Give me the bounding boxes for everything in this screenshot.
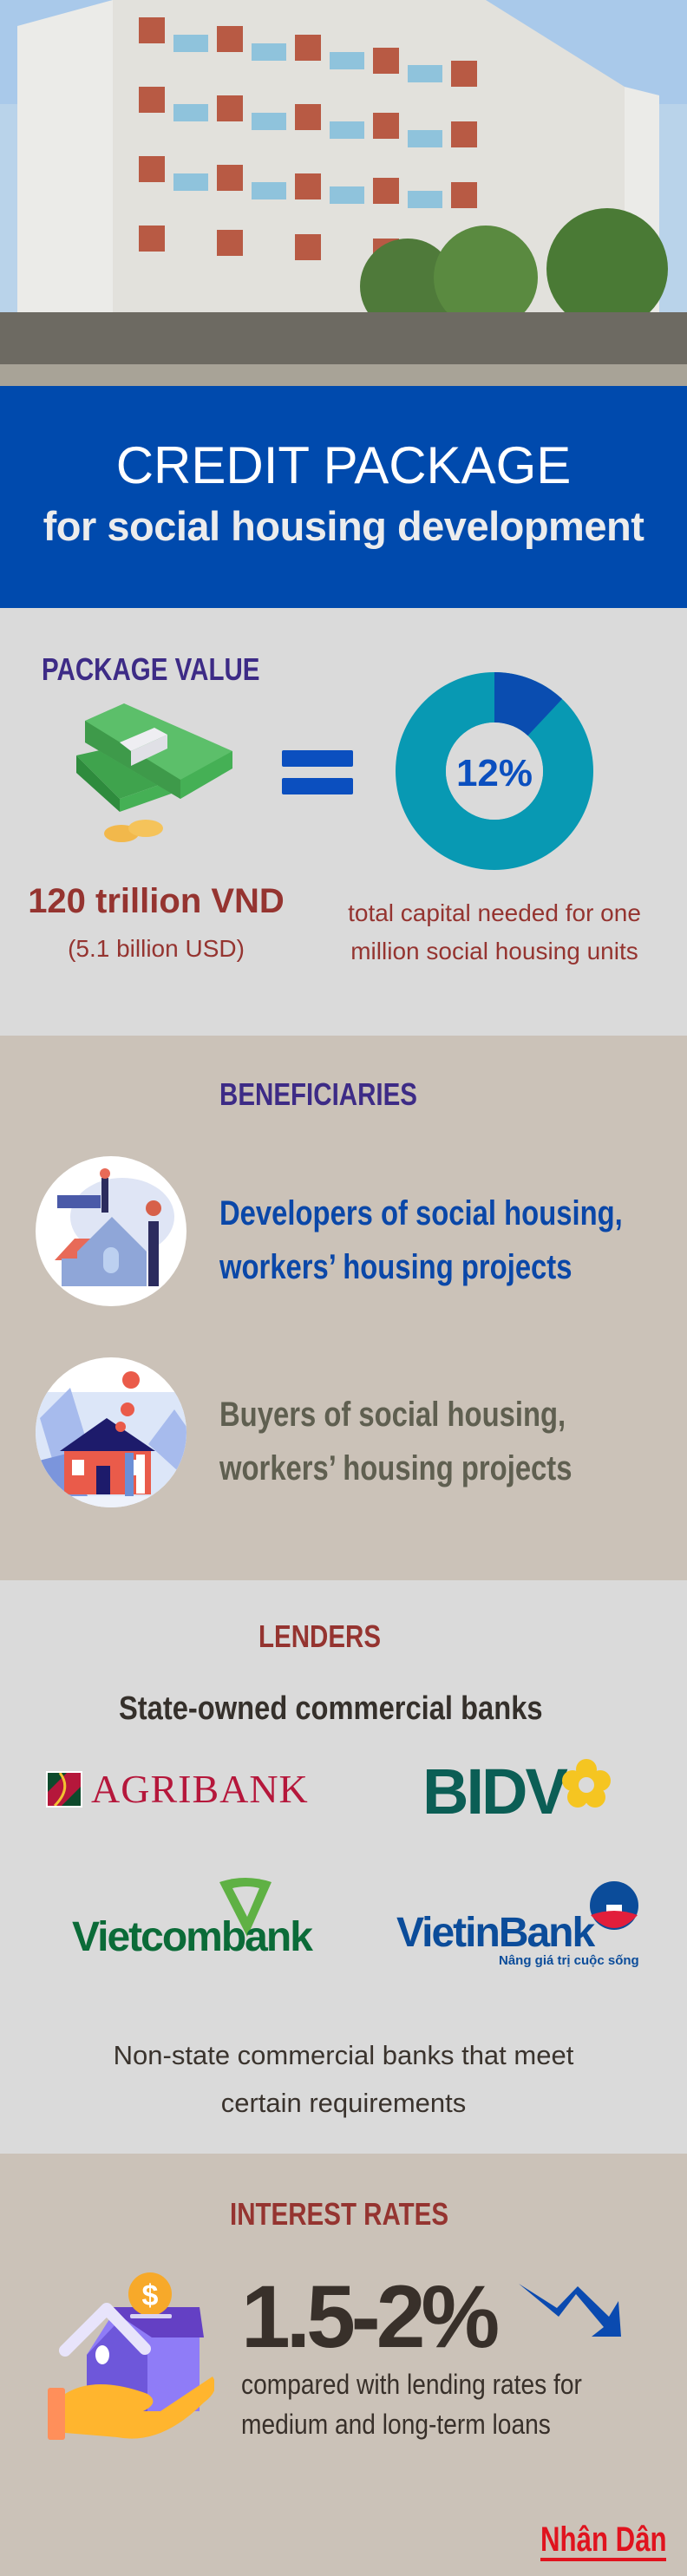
panel: lenders xyxy=(0,1580,687,2154)
logo: VietinBank: VietinBank xyxy=(396,1910,593,1956)
text: total capital needed: total capital needed for one million social housing units xyxy=(348,899,641,964)
subtitle: for social housing development xyxy=(43,503,644,549)
logo: Agribank: AGRIBANK xyxy=(91,1767,309,1811)
icon: house in hand with coin xyxy=(48,2272,214,2440)
panel: package value xyxy=(0,608,687,1030)
panel: interest rates xyxy=(0,2154,687,2576)
icon: house in hand with coin: $ xyxy=(142,2279,159,2312)
photo: social housing building xyxy=(0,0,687,386)
donut chart: 12% xyxy=(396,672,593,870)
title: CREDIT PACKAGE: CREDIT PACKAGE xyxy=(116,436,571,494)
heading: lenders: LENDERS xyxy=(258,1618,381,1654)
text: 5.1 billion USD: (5.1 billion USD) xyxy=(68,935,245,962)
heading: interest rates: INTEREST RATES xyxy=(230,2196,448,2232)
stat: 1.5-2%: 1.5-2% xyxy=(241,2267,495,2366)
text: non-state banks: Non-state commercial banks that meet xyxy=(114,2040,573,2070)
icon: developers circle xyxy=(36,1156,186,1306)
subheading: state-owned commercial banks: State-owned commercial banks xyxy=(119,1690,543,1727)
icon: down arrow xyxy=(519,2284,621,2337)
logo: Vietcombank: Vietcombank xyxy=(72,1914,311,1960)
icon: money stack xyxy=(76,703,232,842)
title banner xyxy=(0,386,687,608)
text: developers: workers’ housing projects xyxy=(219,1248,572,1286)
logo: Vietcombank xyxy=(72,1878,313,1960)
text: compared with lending rates: medium and long-term loans xyxy=(241,2409,551,2440)
text: buyers xyxy=(219,1396,572,1487)
text: non-state banks: certain requirements xyxy=(221,2088,466,2118)
text: 120 trillion VND: 120 trillion VND xyxy=(28,882,285,920)
donut chart: 12%: 12% xyxy=(456,752,533,794)
text: compared with lending rates: compared with lending rates for xyxy=(241,2369,582,2400)
logo: VietinBank xyxy=(396,1881,639,1968)
text: developers: Developers of social housing, xyxy=(219,1194,623,1232)
logo: VietinBank: Nâng giá trị cuộc sống xyxy=(499,1953,639,1968)
icon: equals sign xyxy=(282,750,353,794)
icon: buyers circle xyxy=(36,1357,186,1507)
heading: beneficiaries: BENEFICIARIES xyxy=(219,1076,417,1112)
text: non-state banks xyxy=(114,2040,574,2118)
panel: beneficiaries xyxy=(0,1036,687,1580)
heading: package value: PACKAGE VALUE xyxy=(42,651,259,687)
text: buyers: Buyers of social housing, xyxy=(219,1396,566,1434)
text: buyers: workers’ housing projects xyxy=(219,1449,572,1487)
text: developers xyxy=(219,1194,623,1286)
logo: Nhan Dan: Nhân Dân xyxy=(540,2520,667,2559)
logo: BIDV: BIDV xyxy=(422,1755,566,1827)
text: compared with lending rates xyxy=(241,2369,582,2440)
